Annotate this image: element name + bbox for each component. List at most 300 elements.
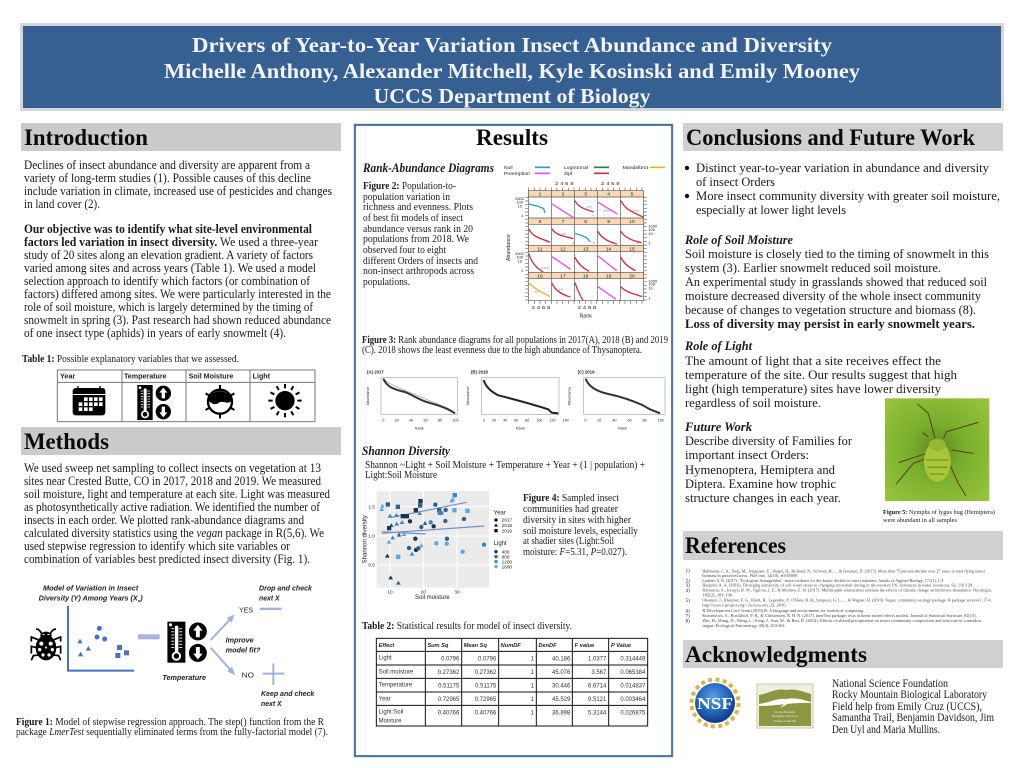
intro paragraph 1: variety of long-term studies (1). Possible causes of this decline: [24, 171, 311, 185]
table 1: explanatory variables: Temperature: [124, 374, 167, 381]
reference list: Leather, S. R. (2017). "Ecological Armageddon" -more evidence for the drastic decline in insect numbers. Annals of Applied Biology, 171(1), 1-3: [702, 578, 943, 584]
chart legend: Light: [494, 541, 507, 547]
figure 2: rank-abundance lattice chart: [504, 165, 665, 320]
table values: 45.529: [552, 697, 571, 703]
axis labels: 2 4 6 8: [578, 305, 597, 310]
logo: RMBL: Biological Laboratory: [772, 714, 799, 718]
future work: structure changes in each year.: [685, 490, 841, 505]
table values: 0.026875: [620, 710, 646, 716]
label: keep: next X: [261, 701, 282, 708]
axis labels: 1: [521, 268, 524, 273]
axis labels: 30: [454, 589, 460, 594]
axis labels: 2 4 6 8: [601, 181, 620, 186]
reference list: 3): [686, 584, 690, 589]
intro paragraph 2: [24, 222, 331, 340]
model formula: Light:Soil Moisture: [365, 469, 437, 481]
panel: results: [353, 123, 674, 758]
axis labels: 1000: [515, 196, 525, 201]
intro paragraph 1: [24, 158, 332, 211]
title text: Michelle Anthony, Alexander Mitchell, Kyle Kosinski and Emily Mooney: [164, 59, 860, 83]
figure 4 caption: diversity in sites with higher: [523, 515, 631, 526]
reference list: steppe. Ecological Entomology, 39(4), 453-461.: [702, 623, 786, 629]
plus: keep term: [263, 663, 284, 685]
dash: drop term: [260, 608, 282, 610]
figure 1: stepwise regression model: [31, 586, 315, 708]
axis labels: 2 4 6 8: [555, 181, 574, 186]
table values: 6.6714: [588, 683, 607, 689]
arrow: no branch: [211, 648, 235, 675]
figure 4 caption: soil moisture levels, especially: [523, 526, 639, 537]
observed points: [535, 207, 639, 292]
table 1: explanatory variables: [57, 370, 315, 422]
plot B 2018: (B) 2018: [471, 370, 488, 375]
plot C 2019: Rank: [618, 427, 627, 431]
table values: 1: [531, 656, 535, 662]
reference list: [686, 568, 992, 629]
figure 4 caption: at shadier sites (Light:Soil: [523, 536, 614, 547]
panel: references: [683, 531, 1003, 629]
label: improve: Improve: [226, 637, 254, 644]
plot C 2019: 0 20 40 60 80 100: [584, 419, 664, 423]
panel numbers: 15: [629, 246, 635, 252]
heading: references: References: [685, 533, 786, 558]
figure 5 caption: were abundant in all samples: [883, 518, 958, 524]
label: drop: next X: [259, 596, 280, 603]
intro paragraph 2: selection approach to identify which factors (or combination of: [24, 274, 311, 288]
chart legend: 1600: [502, 564, 512, 569]
axis labels: 1: [648, 241, 651, 246]
role of light: regardless of soil moisture.: [685, 395, 821, 410]
title text: UCCS Department of Biology: [374, 84, 651, 108]
icon: calendar: [73, 386, 105, 415]
diagram heading: ): [139, 596, 143, 603]
reference list: R Development Core Team (2019) R: A language and environment for statistical computing.: [702, 608, 864, 613]
table values: 0.314449: [620, 656, 646, 662]
reference list: biomass in protected areas. PloS one, 12(10), e0185809.: [702, 573, 798, 579]
table values: 0.065384: [620, 670, 646, 676]
table values: 0.40766: [438, 710, 460, 716]
table values: 9.5121: [588, 697, 607, 703]
figure 2 caption: populations from 2018. We: [363, 234, 469, 245]
acknowledgments text: Field help from Emily Cruz (UCCS),: [832, 701, 982, 713]
table values: 40.186: [552, 656, 571, 662]
role of soil moisture: Soil moisture is closely tied to the timing of snowmelt in this: [685, 246, 989, 261]
figure 1 caption: [16, 717, 328, 738]
table values: 30.446: [552, 683, 571, 689]
role of soil moisture: Loss of diversity may persist in early snowmelt years.: [685, 316, 975, 331]
conclusion bullets: especially at lower light levels: [696, 202, 846, 217]
role of soil moisture: An experimental study in grasslands showed that reduced soil: [685, 274, 987, 289]
axis labels: 1: [648, 296, 651, 301]
panel numbers: 1: [539, 192, 542, 198]
table 1: explanatory variables: Soil Moisture: [189, 374, 233, 381]
table header: DenDF: [538, 643, 557, 649]
methods text: soil moisture, light and temperature at each site. Light was measured: [24, 487, 330, 501]
figure 2 caption: [363, 181, 479, 288]
heading: conclusions: Conclusions and Future Work: [686, 125, 975, 150]
axis labels: 2 4 6 8: [532, 305, 551, 310]
panel numbers: 13: [583, 246, 589, 252]
role of light: light (high temperature) sites have lower diversity: [685, 381, 941, 396]
reference list: 1): [686, 570, 690, 575]
label: drop: Drop and check: [259, 586, 313, 593]
axis labels: 1.0: [368, 534, 375, 539]
figure 2 caption: different Orders of insects and: [363, 256, 479, 267]
plot B 2018: Rank: [516, 427, 525, 431]
table values: 1: [531, 683, 535, 689]
fitted curves: [529, 201, 643, 300]
axis labels: 10: [518, 203, 523, 208]
conclusion bullets: Distinct year-to-year variation in abundance and diversity: [696, 160, 989, 175]
trend lines: [382, 502, 484, 534]
panel numbers: 17: [560, 273, 566, 279]
future work: [684, 419, 853, 505]
axis labels: Abundance: [506, 234, 512, 261]
panel numbers: 11: [537, 246, 543, 252]
panel frames: [528, 191, 644, 301]
intro paragraph 1: include variation in climate, increased use of pesticides and changes: [24, 184, 332, 198]
heading: methods: Methods: [24, 429, 109, 454]
panel numbers: 19: [606, 273, 612, 279]
figure 2 caption: of best fit models of insect: [363, 213, 463, 224]
chart legend: 800: [502, 554, 510, 559]
logo: NSF: [692, 680, 738, 726]
chart legend: 2019: [502, 528, 512, 533]
methods text: sites near Crested Butte, CO in 2017, 2018 and 2019. We measured: [24, 474, 321, 488]
chart legend: 1200: [502, 559, 512, 564]
table row labels: Light:Soil: [379, 709, 403, 715]
chart legend: Preemption: [504, 171, 530, 177]
panel: introduction: [21, 123, 341, 340]
label: improve: [226, 637, 261, 655]
label: yes: YES: [239, 605, 253, 614]
reference list: Robinson, A., Inouye, D. W., Ogilvie, J. E., & Mooney, E. H. (2017). Multitrophic interactions mediate the effects of climate change on herbivore abundance. Oecologia,: [702, 588, 992, 594]
chart legend: Zipf: [564, 171, 573, 177]
table values: 36.898: [552, 710, 571, 716]
axis labels: 20: [421, 589, 426, 594]
axis labels: 0.5: [368, 563, 375, 568]
logo: RMBL: Science at the Top: [774, 719, 796, 723]
methods text: calculated diversity statistics using the vegan package in R(5,6). We: [24, 526, 324, 540]
table values: 1: [531, 697, 535, 703]
intro paragraph 2: varied among sites and across years (Table 1). We used a model: [24, 261, 317, 275]
squares: 2019: [386, 493, 470, 559]
circles: 2017: [407, 502, 486, 554]
acknowledgments text: Samantha Trail, Benjamin Davidson, Jim: [832, 712, 994, 724]
panel: conclusions: [683, 123, 1003, 505]
role of soil moisture: system (3). Earlier snowmelt reduced soil moisture.: [685, 260, 941, 275]
axis labels: 100: [648, 282, 656, 287]
figure 5: lygus bug photo: [885, 398, 989, 501]
table values: 1: [531, 670, 535, 676]
role of soil moisture: because of changes to vegetation structure and biomass (8).: [685, 302, 976, 317]
table row labels: Year: [379, 696, 391, 702]
chart legend: Mandelbrot: [623, 165, 649, 171]
model formula: [365, 459, 645, 481]
figure 5 caption: [883, 509, 995, 524]
panel numbers: 16: [537, 273, 543, 279]
reference list: Hallmann, C. A., Sorg, M., Jongejans, E., Siepel, H., Hofland, N., Schwan, H., ... & Goulson, D. (2017). More than 75 percent decline over 27 years in total flying insect: [702, 568, 986, 574]
table header: F value: [575, 643, 594, 649]
figure 3 caption: [362, 335, 668, 356]
reference list: Oksanen, J., Blanchet, F. G., Kindt, R., Legendre, P., O'Hara, R. B., Simpson, G. L., ... & Wagner, H. (2010). Vegan: community ecology package. R package version 1.17-4.: [702, 598, 992, 604]
plot A 2017: Rank: [415, 427, 424, 431]
future work: important insect Orders:: [685, 447, 809, 462]
role of light: temperature of the site. Our results suggest that high: [685, 367, 957, 382]
axis labels: 1.5: [368, 504, 375, 509]
panel numbers: 3: [584, 192, 587, 198]
intro paragraph 1: in land cover (2).: [24, 197, 100, 211]
intro paragraph 1: Declines of insect abundance and diversity are apparent from a: [24, 158, 311, 172]
reference list: 185(2), 181-190.: [702, 592, 733, 598]
plot A 2017: [366, 370, 458, 431]
heading: introduction: Introduction: [24, 125, 148, 150]
heading: results: Results: [476, 125, 548, 150]
table values: 0.27362: [475, 670, 497, 676]
table values: [438, 656, 646, 716]
chart legend: Year: [494, 510, 506, 516]
table values: 0.51175: [438, 683, 460, 689]
axis labels: 1000: [515, 251, 525, 256]
panel numbers: 6: [539, 219, 542, 225]
axis labels: 10: [648, 231, 654, 236]
reference list: Harpold, A. A. (2016). Diverging sensitivity of soil water stress to changing snowmelt timing in the western US. Advances in water resources, 92, 116-129.: [702, 583, 973, 589]
axis labels: [368, 504, 460, 594]
reference list: 7): [686, 614, 690, 619]
diagram heading: Model of Variation in Insect: [43, 586, 139, 593]
label: no: NO: [242, 670, 254, 679]
table header: [379, 643, 631, 649]
panel numbers: 12: [560, 246, 566, 252]
logo: NSF: NSF: [697, 694, 733, 713]
acknowledgments text: Den Uyl and Maria Mullins.: [832, 724, 940, 736]
plot C 2019: [567, 370, 665, 431]
plot C 2019: Abundance: [567, 387, 571, 405]
table 2 caption: Table 2: Statistical results for model of insect diversity.: [362, 621, 572, 632]
future work: Hymenoptera, Hemiptera and: [685, 462, 835, 477]
intro paragraph 2: factors led variation in insect diversity. We used a three-year: [24, 235, 318, 249]
acknowledgments text: National Science Foundation: [832, 678, 948, 690]
axis labels: Rank: [579, 314, 592, 320]
minus sign: [138, 634, 160, 639]
table values: 0.72965: [475, 697, 497, 703]
axis labels: 100: [516, 199, 524, 204]
label: keep: [261, 691, 315, 708]
table row labels: [379, 656, 414, 724]
chart legend: 400: [502, 549, 510, 554]
table values: 0.27362: [438, 670, 460, 676]
arrow: yes branch: [211, 614, 235, 640]
panel numbers: 4: [607, 192, 610, 198]
logo: RMBL: [757, 684, 813, 728]
methods text: as photosynthetically active radiation. We identified the number of: [24, 500, 321, 514]
conclusion bullets: of insect Orders: [696, 174, 775, 189]
table values: 0.40766: [475, 710, 497, 716]
diagram heading: [39, 586, 143, 603]
table values: 1: [531, 710, 535, 716]
figure 4 caption: [523, 493, 639, 558]
panel numbers: 8: [584, 219, 587, 225]
axis labels: 10: [518, 258, 523, 263]
intro paragraph 2: snowmelt in spring (3). Past research had shown reduced abundance: [24, 313, 331, 327]
methods text: used stepwise regression to identify which site variables or: [24, 539, 290, 553]
table 1: explanatory variables: Year: [60, 374, 76, 381]
chart legend: 2017: [502, 518, 512, 523]
icon: temperature: [167, 622, 207, 663]
figure 4 caption: communities had greater: [523, 504, 618, 515]
plot B 2018: [466, 370, 569, 431]
reference list: Kuznetsova, A., Brockhoff, P. B., & Christensen, R. H. B. (2017). lmerTest package: tests in linear mixed effects models. Journal of Statistical Software, 82(13).: [702, 613, 977, 619]
chart legend: Lognormal: [564, 165, 588, 171]
panel numbers: 18: [583, 273, 589, 279]
reference list: 4): [686, 589, 690, 594]
figure 2 caption: population variation in: [363, 192, 451, 203]
panel numbers: 5: [631, 192, 634, 198]
conclusion bullets: [685, 160, 1000, 217]
figure 3 caption: (C). 2018 shows the least evenness due to the high abundance of Thysanoptera.: [362, 345, 642, 356]
role of light: [684, 338, 957, 410]
figure 2 caption: populations.: [363, 277, 410, 288]
intro paragraph 2: factors) differed among sites. We were particularly interested in the: [24, 287, 331, 301]
icon: ladybug: [31, 629, 61, 660]
model formula: Shannon ~Light + Soil Moisture + Temperature + Year + (1 | population) +: [365, 459, 645, 471]
heading: acknowledgments: Acknowledgments: [685, 642, 867, 667]
figure 4 caption: Figure 4: Sampled insect: [523, 493, 619, 504]
plot A 2017: 0 20 40 60 80 100: [382, 419, 458, 423]
acknowledgments text: Rocky Mountain Biological Laboratory: [832, 689, 987, 701]
logo: RMBL: Rocky Mountain: [775, 710, 796, 714]
table values: 0.0796: [441, 656, 460, 662]
panel numbers: 14: [606, 246, 612, 252]
plot B 2018: 0 20 40 60 80 100 120 140: [483, 419, 569, 423]
future work: Diptera. Examine how trophic: [685, 476, 836, 491]
chart legend: [494, 510, 512, 569]
intro paragraph 2: of one insect type (aphids) in years of early snowmelt (4).: [24, 326, 286, 340]
reference list: 2): [686, 579, 690, 584]
plot A 2017: Abundance: [366, 387, 370, 405]
reference list: http://cran.r-project.org>.Acesso em, 23, 2010.: [702, 603, 787, 609]
chart legend: Null: [504, 165, 513, 171]
table values: 45.076: [552, 670, 571, 676]
triangles: 2018: [379, 497, 455, 585]
chart legend: [504, 165, 665, 177]
axis labels: 1000: [648, 278, 658, 283]
diagram heading: Diversity (Y) Among Years (X: [39, 596, 135, 603]
table header: NumDF: [501, 643, 521, 649]
role of soil moisture: Role of Soil Moisture: [684, 232, 793, 247]
future work: Future Work: [684, 419, 752, 434]
intro paragraph 2: Our objective was to identify what site-level environmental: [24, 222, 313, 236]
figure 4: scatter plot: [363, 491, 512, 601]
panel numbers: 7: [562, 219, 565, 225]
figure 1 caption: Figure 1: Model of stepwise regression approach. The step() function from the R: [16, 717, 325, 728]
figure 4: scatter plot: Soil moisture: [415, 595, 450, 601]
plot B 2018: Abundance: [466, 387, 470, 405]
label: keep: Keep and check: [261, 691, 315, 698]
figure 3 caption: Figure 3: Rank abundance diagrams for all populations in 2017(A), 2018 (B) and 2019: [362, 335, 668, 346]
table row labels: Temperature: [379, 683, 413, 689]
methods text: [24, 461, 330, 566]
bug body: [924, 442, 951, 482]
table values: 0.51175: [475, 683, 497, 689]
table 1: explanatory variables: Light: [253, 374, 271, 381]
label: drop: [259, 586, 313, 603]
chart legend: 2018: [502, 523, 512, 528]
table row labels: Moisture: [379, 718, 402, 724]
table values: 0.003464: [620, 697, 646, 703]
reference list: 5): [686, 599, 690, 604]
figure 4 caption: moisture: F=5.31, P=0.027).: [523, 547, 627, 558]
table 2: statistical results: [376, 638, 648, 726]
table values: 3.567: [591, 670, 607, 676]
role of soil moisture: moisture decreased diversity of the whole insect community: [685, 288, 981, 303]
icon: thermometer with arrows: [137, 385, 171, 420]
icon: soil moisture: [206, 385, 234, 418]
methods text: insects in each order. We plotted rank-abundance diagrams and: [24, 513, 304, 527]
figure 2 caption: Figure 2: Population-to-: [363, 181, 456, 192]
title text: Drivers of Year-to-Year Variation Insect Abundance and Diversity: [192, 33, 832, 57]
table header: Sum Sq: [427, 643, 449, 649]
icon: sun: [268, 384, 302, 417]
conclusion bullets: More insect community diversity with greater soil moisture,: [696, 188, 1000, 203]
table values: 0.72965: [438, 697, 460, 703]
plot C 2019: (C) 2019: [578, 370, 595, 375]
intro paragraph 2: study of 20 sites along an elevation gradient. A variety of factors: [24, 248, 313, 262]
table header: Mean Sq: [464, 643, 487, 649]
table values: 5.3144: [588, 710, 607, 716]
role of soil moisture: [684, 232, 989, 331]
figure 2 caption: non-insect arthropods across: [363, 266, 474, 277]
table values: 1.0377: [588, 656, 607, 662]
panel numbers: [537, 192, 635, 279]
panel numbers: 10: [629, 219, 635, 225]
plot A 2017: (A) 2017: [367, 370, 384, 375]
table 1 caption: Table 1: Possible explanatory variables that we assessed.: [22, 354, 239, 365]
axis labels: 1: [521, 213, 524, 218]
methods text: combination of variables best predicted insect diversity (Fig. 1).: [24, 552, 310, 566]
methods text: We used sweep net sampling to collect insects on vegetation at 13: [24, 461, 321, 475]
acknowledgments text: [832, 678, 994, 736]
panel strips: [528, 191, 644, 279]
table row labels: Soil moisture: [379, 669, 414, 675]
reference list: Zhu, H., Wang, D., Wang, L., Fang, J., Sun, W., & Ren, B. (2014). Effects of altered precipitation on insect community composition and structure in a meadow: [702, 618, 982, 624]
bug legs: [896, 404, 978, 496]
title banner: [20, 23, 1004, 111]
figure 2 caption: richness and evenness. Plots: [363, 202, 473, 213]
title text: [164, 33, 860, 108]
label: temperature: Temperature: [162, 675, 206, 682]
axis labels: [506, 181, 658, 320]
label: improve: model fit?: [226, 648, 261, 655]
axis labels: 10: [648, 286, 654, 291]
figure 1 caption: package LmerTest sequentially eliminated terms from the fully-factorial model (7).: [16, 727, 328, 738]
future work: Describe diversity of Families for: [685, 433, 853, 448]
axis labels: 100: [516, 254, 524, 259]
axis labels: 1000: [648, 224, 658, 229]
panel: acknowledgments: [683, 640, 1003, 736]
diagram heading: n: [138, 598, 141, 603]
table header: Effect: [379, 643, 395, 649]
table values: 0.014837: [620, 683, 646, 689]
heading: shannon diversity: Shannon Diversity: [362, 443, 450, 458]
table values: 0.0796: [478, 656, 497, 662]
role of light: Role of Light: [684, 338, 752, 353]
panel numbers: 2: [562, 192, 565, 198]
panel numbers: 9: [607, 219, 610, 225]
intro paragraph 2: role of soil moisture, which is largely determined by the timing of: [24, 300, 314, 314]
table header: P Value: [611, 643, 631, 649]
role of light: The amount of light that a site receives effect the: [685, 353, 941, 368]
